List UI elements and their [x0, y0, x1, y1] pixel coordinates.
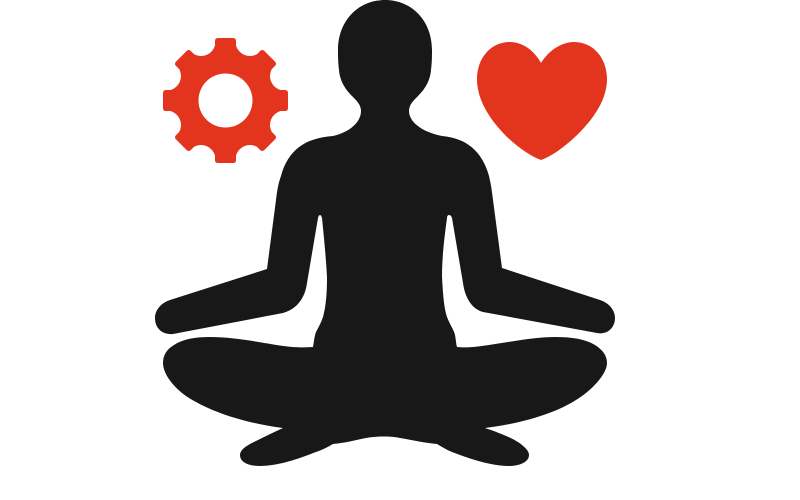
- icon: heart: [477, 42, 607, 160]
- icon: meditating figure: [155, 0, 615, 466]
- icon: gear: [163, 38, 288, 163]
